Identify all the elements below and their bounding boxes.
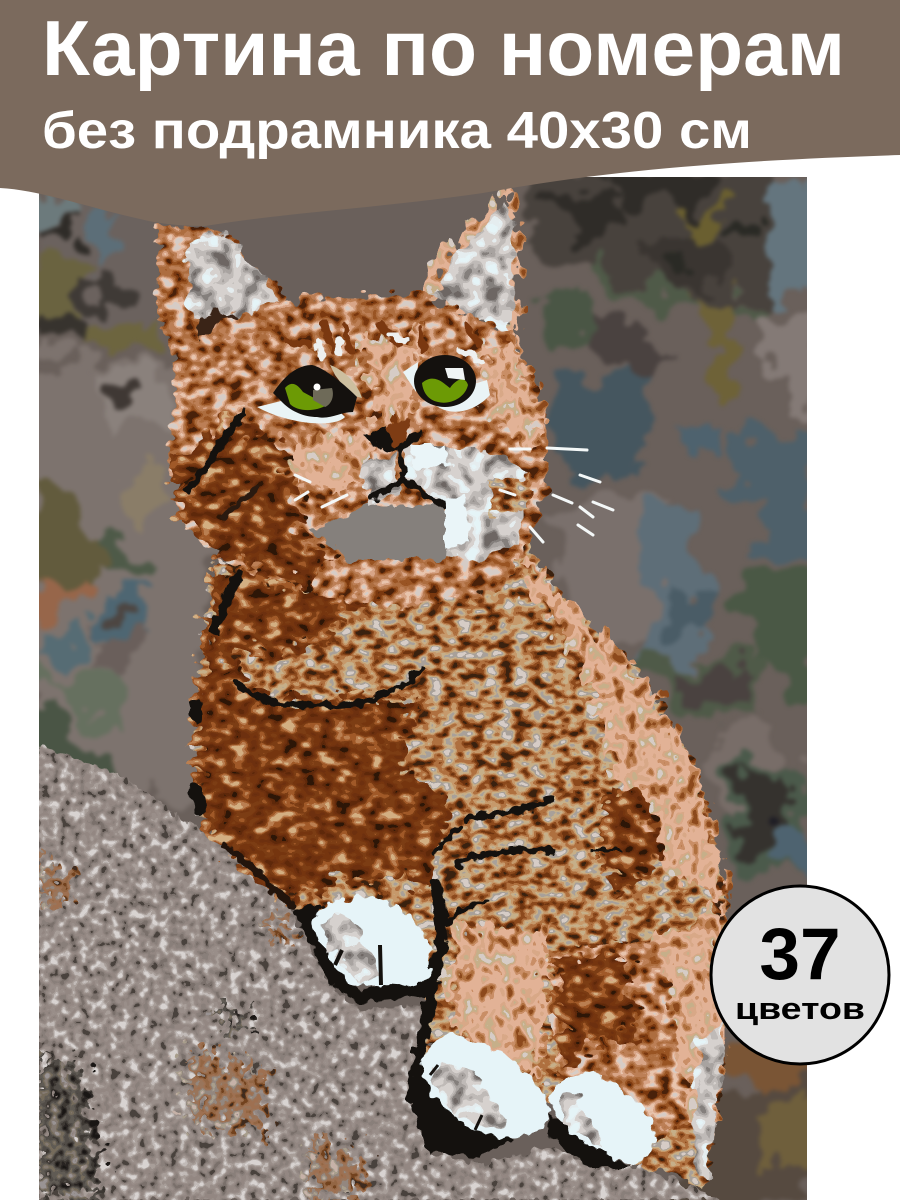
cat head bbox=[157, 193, 547, 610]
cat eyes bbox=[257, 355, 490, 423]
right eye bbox=[403, 355, 490, 412]
cat whiskers bbox=[295, 448, 613, 542]
painting background blotches bbox=[20, 172, 815, 1200]
painting: ginger cat on a stone bbox=[20, 172, 815, 1200]
right ear bbox=[420, 193, 520, 340]
badge: 37 colours: цветов bbox=[735, 991, 865, 1026]
front paws bbox=[294, 897, 656, 1168]
muzzle bbox=[310, 505, 470, 560]
cat nose bbox=[363, 420, 423, 452]
cat bbox=[157, 193, 726, 1185]
left paw bbox=[294, 897, 436, 1003]
title: Картина по номерам bbox=[42, 4, 845, 92]
badge: 37 colours: 37 bbox=[759, 914, 841, 995]
middle paw bbox=[412, 1034, 550, 1157]
left eye bbox=[257, 365, 362, 423]
header banner bbox=[0, 0, 900, 226]
right paw bbox=[548, 1074, 656, 1168]
stone bbox=[39, 745, 720, 1200]
left ear bbox=[152, 223, 286, 364]
forehead stripes bbox=[285, 322, 480, 352]
cat black contour lines bbox=[187, 413, 620, 1100]
subtitle: без подрамника 40х30 см bbox=[42, 102, 752, 160]
badge: 37 colours bbox=[711, 886, 889, 1064]
cat body bbox=[195, 545, 726, 1185]
head base bbox=[167, 293, 547, 610]
